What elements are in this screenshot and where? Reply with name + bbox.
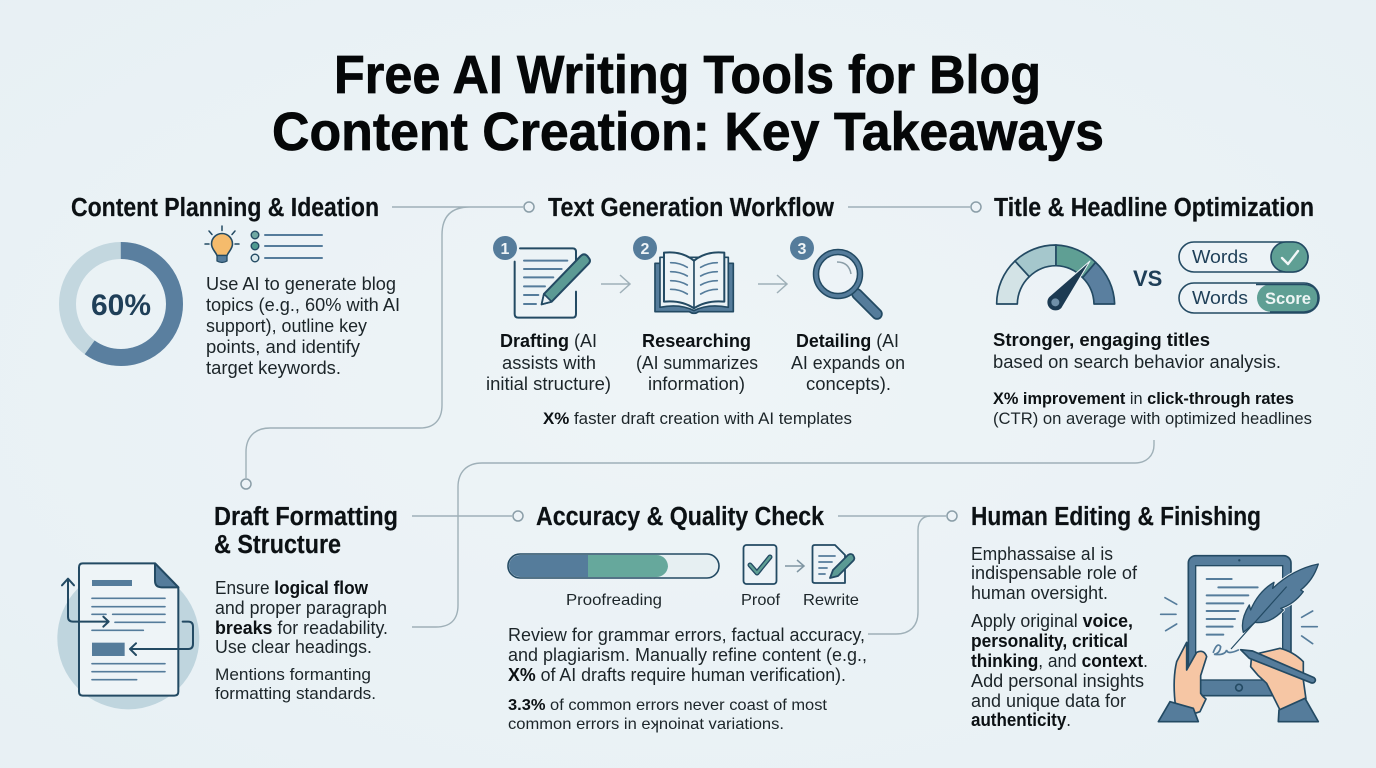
arrow: step 1 to 2 bbox=[601, 275, 630, 293]
badge: step 1 bbox=[493, 236, 517, 260]
text: detailing: concepts). bbox=[806, 374, 891, 394]
text: logical flow: breaks for readability. bbox=[215, 618, 388, 638]
text: planning description: topics (e.g., 60% with AI bbox=[206, 295, 400, 315]
text: logical flow: Ensure logical flow bbox=[215, 578, 369, 598]
icon: proof checkbox bbox=[744, 545, 776, 584]
arrow: step 2 to 3 bbox=[758, 275, 787, 293]
pill: words with check: Words bbox=[1192, 247, 1248, 267]
text: original voice: Apply original voice, bbox=[971, 611, 1133, 631]
text: researching: (AI summarizes bbox=[636, 353, 758, 373]
text: drafting: Drafting (AI bbox=[500, 331, 597, 351]
text: review description: Review for grammar errors, factual accuracy, bbox=[508, 625, 865, 645]
icon: outline list bbox=[251, 231, 322, 262]
label: rewrite: Rewrite bbox=[803, 592, 859, 609]
text: researching bbox=[636, 331, 758, 394]
text: formatting standards: formatting standards. bbox=[215, 685, 376, 703]
text: human oversight: Emphassaise aI is bbox=[971, 544, 1113, 564]
panel: accuracy and quality check bbox=[508, 503, 867, 733]
text: planning description: Use AI to generate blog bbox=[206, 274, 396, 294]
badge: step 1: 1 bbox=[501, 241, 510, 258]
badge: step 3 bbox=[790, 236, 814, 260]
label: vs: VS bbox=[1133, 266, 1162, 291]
badge: step 2: 2 bbox=[641, 241, 650, 258]
pill: words with score: Words bbox=[1192, 288, 1248, 308]
text: detailing: AI expands on bbox=[791, 353, 905, 373]
text: logical flow bbox=[215, 578, 388, 657]
text: stronger titles: Stronger, engaging titles bbox=[993, 330, 1210, 350]
donut chart: 60% bbox=[68, 250, 174, 358]
stat: common errors bbox=[508, 697, 828, 733]
progress bar: proofreading bbox=[508, 554, 719, 578]
text: original voice: personality, critical bbox=[971, 631, 1128, 651]
text: human oversight bbox=[971, 544, 1138, 603]
label: proofreading: Proofreading bbox=[566, 592, 662, 609]
icon: light bulb bbox=[205, 226, 239, 262]
heading: text generation workflow: Text Generation Workflow bbox=[548, 194, 834, 222]
connector lines bbox=[241, 202, 1154, 634]
text: review description: and plagiarism. Manually refine content (e.g., bbox=[508, 645, 867, 665]
panel: human editing and finishing bbox=[971, 503, 1318, 730]
text: logical flow: Use clear headings. bbox=[215, 637, 372, 657]
text: formatting standards: Mentions formanting bbox=[215, 666, 371, 684]
heading: draft formatting bbox=[214, 503, 398, 559]
heading: accuracy: Accuracy & Quality Check bbox=[536, 503, 825, 531]
panel: title and headline optimization bbox=[993, 194, 1319, 428]
panel: content planning and ideation bbox=[68, 194, 400, 378]
stat: faster drafts: X% faster draft creation with AI templates bbox=[543, 410, 852, 428]
donut chart: 60%: 60% bbox=[91, 289, 151, 322]
text: original voice: authenticity. bbox=[971, 710, 1071, 730]
title bbox=[272, 45, 1104, 162]
stat: click-through improvement: (CTR) on average with optimized headlines bbox=[993, 410, 1312, 428]
badge: step 2 bbox=[633, 236, 657, 260]
stat: click-through improvement bbox=[993, 390, 1312, 428]
heading: human editing: Human Editing & Finishing bbox=[971, 503, 1261, 531]
text: drafting: assists with bbox=[502, 353, 596, 373]
icon: structured document with arrows bbox=[57, 563, 199, 709]
text: stronger titles: based on search behavior analysis. bbox=[993, 352, 1281, 372]
text: researching: Researching bbox=[642, 331, 751, 351]
text: original voice bbox=[971, 611, 1148, 730]
icon: rewrite document bbox=[812, 545, 854, 583]
heading: draft formatting: & Structure bbox=[214, 531, 341, 559]
text: logical flow: and proper paragraph bbox=[215, 598, 387, 618]
heading: title and headline: Title & Headline Optimization bbox=[994, 194, 1314, 222]
stat: click-through improvement: X% improvement in click-through rates bbox=[993, 390, 1294, 408]
text: original voice: Add personal insights bbox=[971, 671, 1144, 691]
text: human oversight: indispensable role of bbox=[971, 563, 1138, 583]
text: drafting bbox=[486, 331, 611, 394]
heading: content planning: Content Planning & Ideation bbox=[71, 194, 379, 222]
stat: common errors: 3.3% of common errors never coast of most bbox=[508, 697, 828, 714]
badge: step 3: 3 bbox=[798, 241, 807, 258]
panel: text generation workflow bbox=[486, 194, 905, 428]
pill: words with score: Score bbox=[1265, 290, 1311, 308]
text: original voice: thinking, and context. bbox=[971, 651, 1148, 671]
text: planning description: support), outline key bbox=[206, 316, 367, 336]
text: review description: X% of AI drafts require human verification). bbox=[508, 665, 846, 685]
text: original voice: and unique data for bbox=[971, 691, 1126, 711]
text: planning description bbox=[206, 274, 400, 378]
icon: open book bbox=[655, 252, 733, 313]
text: detailing: Detailing (AI bbox=[796, 331, 899, 351]
panel: draft formatting and structure bbox=[57, 503, 398, 709]
text: researching: information) bbox=[648, 374, 745, 394]
text: planning description: target keywords. bbox=[206, 358, 341, 378]
text: formatting standards bbox=[215, 666, 376, 703]
icon: tablet, feather and hands bbox=[1158, 556, 1318, 722]
icon: drafting document and pencil bbox=[515, 248, 590, 318]
text: review description bbox=[508, 625, 867, 685]
text: human oversight: human oversight. bbox=[971, 583, 1108, 603]
text: planning description: points, and identify bbox=[206, 337, 360, 357]
label: proof: Proof bbox=[741, 592, 781, 609]
heading: draft formatting: Draft Formatting bbox=[214, 503, 398, 531]
title: Free AI Writing Tools for Blog bbox=[334, 45, 1041, 105]
title: Content Creation: Key Takeaways bbox=[272, 102, 1104, 162]
stat: common errors: common errors in eʞnoinat variations. bbox=[508, 716, 784, 733]
gauge chart bbox=[997, 245, 1115, 311]
icon: magnifying glass bbox=[816, 252, 877, 314]
arrow: proof to rewrite bbox=[785, 560, 804, 572]
text: detailing bbox=[791, 331, 905, 394]
pill: words with score bbox=[1179, 283, 1319, 313]
pill: words with check bbox=[1179, 242, 1308, 272]
text: drafting: initial structure) bbox=[486, 374, 611, 394]
text: stronger titles bbox=[993, 330, 1281, 372]
